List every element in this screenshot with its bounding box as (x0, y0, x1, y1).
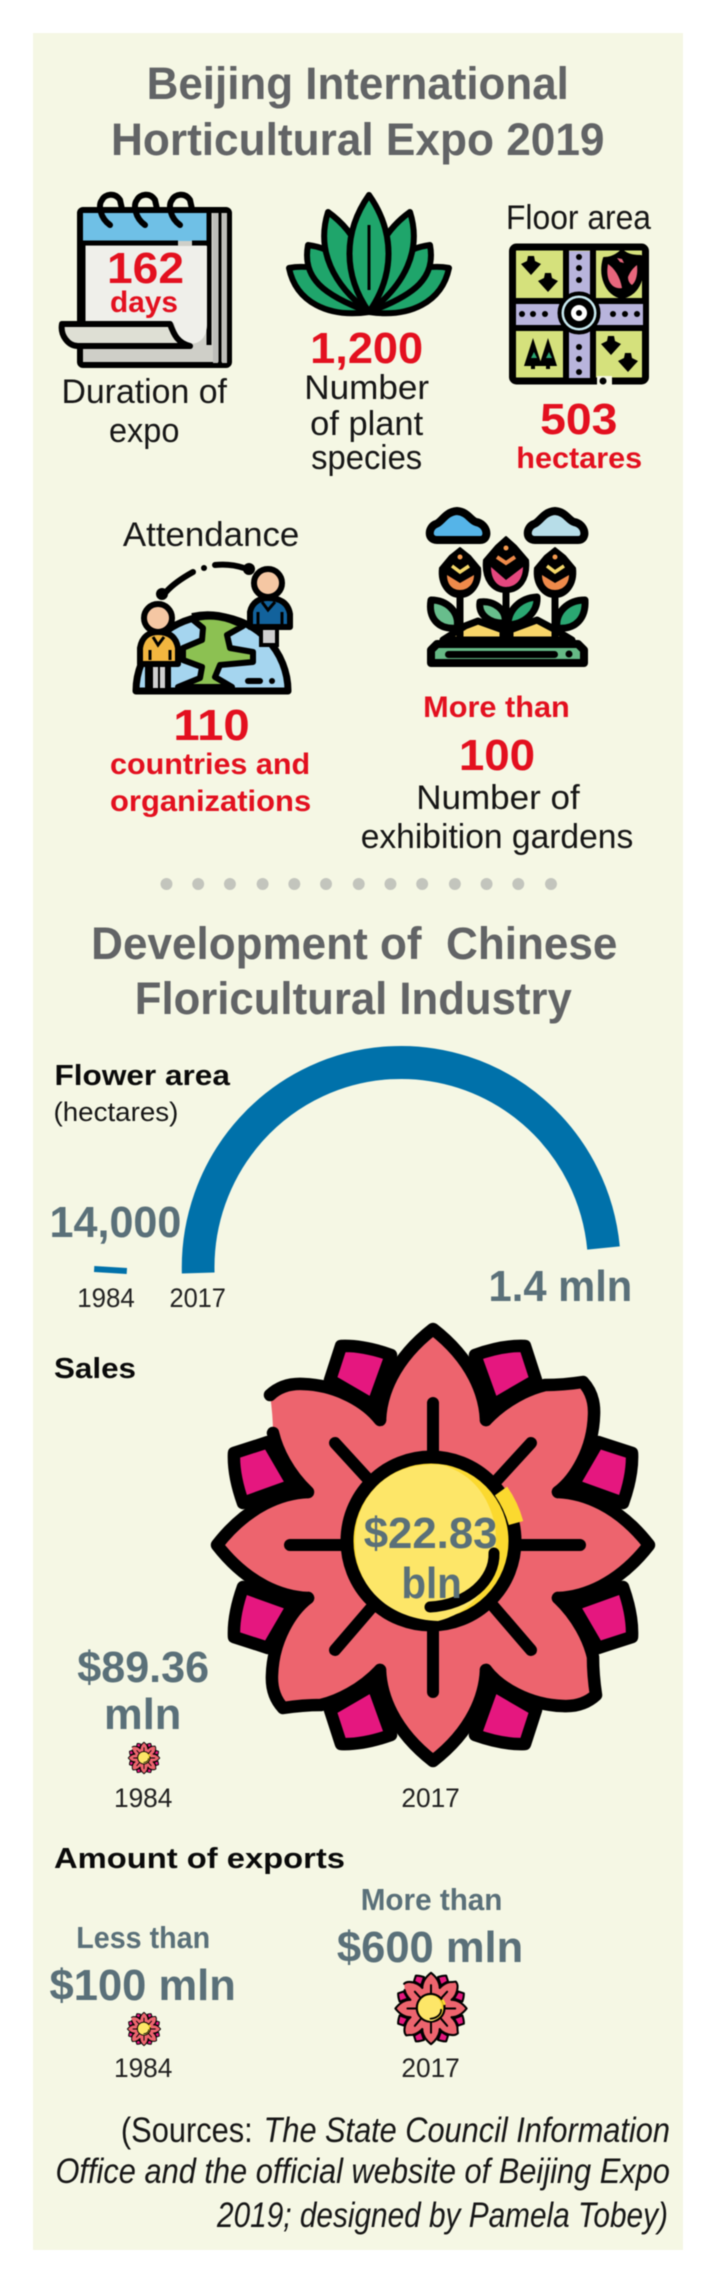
value: 1984 exports: Less than (76, 1920, 210, 1955)
value: 1984 sales (77, 1643, 209, 1739)
stat: plant species (304, 324, 429, 477)
icon: plant (289, 195, 449, 313)
year label 2017: 2017 (169, 1283, 226, 1313)
heading: development of Chinese floricultural industry (91, 919, 617, 1024)
source note: The State Council Information (264, 2111, 670, 2150)
year labels: exports (114, 2053, 460, 2083)
value: 2017 sales: bln (401, 1559, 462, 1608)
stat: exhibition gardens: exhibition gardens (361, 818, 633, 856)
icon: garden map (512, 247, 646, 386)
calendar number: 162 (107, 244, 184, 293)
year labels: exports: 1984 (114, 2053, 172, 2083)
stat: floor area value: hectares (516, 442, 642, 475)
stat: attendance value: 110 (173, 701, 250, 750)
chart: flower area arcs (50, 1062, 632, 1313)
icon: calendar with 162 days (62, 195, 229, 365)
stat: attendance value (110, 701, 311, 818)
label: attendance: Attendance (123, 516, 299, 554)
icon: exhibition garden (430, 511, 585, 663)
icon: small flower for 1984 sales (128, 1742, 160, 1774)
stat: plant species: species (311, 439, 422, 477)
year label 1984: 1984 (77, 1283, 135, 1313)
label: duration of expo: Duration of (61, 373, 228, 411)
stat: attendance value: organizations (110, 785, 311, 818)
value: 2017 sales: $22.83 (364, 1509, 497, 1558)
source note (55, 2111, 670, 2235)
heading: flower area: Flower area (55, 1060, 231, 1092)
stat: exhibition gardens: Number of (416, 779, 580, 817)
stat: exhibition gardens: 100 (459, 731, 535, 780)
title: Beijing International (147, 59, 569, 109)
stat: plant species: 1,200 (310, 324, 423, 373)
label: floor area: Floor area (506, 199, 651, 237)
value: 1984 exports (50, 1920, 236, 2010)
value: 2017 exports: $600 mln (337, 1923, 523, 1972)
heading: flower area (54, 1060, 231, 1127)
value: 2017 exports (337, 1882, 523, 1972)
value: 2017 flower area: 1.4 mln (489, 1262, 632, 1311)
heading: flower area: (hectares) (54, 1097, 178, 1127)
icon: small flower for 1984 exports (127, 2012, 161, 2046)
value: 1984 sales: $89.36 (77, 1643, 209, 1692)
title: Horticultural Expo 2019 (111, 115, 605, 165)
label: duration of expo: expo (109, 412, 179, 450)
value: 2017 sales (364, 1509, 497, 1608)
stat: plant species: Number (304, 369, 429, 407)
value: 1984 flower area: 14,000 (50, 1198, 181, 1247)
calendar unit: days (110, 286, 178, 319)
year labels: exports: 2017 (401, 2053, 460, 2083)
heading: sales: Sales (54, 1353, 136, 1385)
stat: exhibition gardens (361, 691, 633, 856)
title (111, 59, 605, 165)
stat: floor area value: 503 (540, 395, 617, 444)
heading: amount of exports: Amount of exports (54, 1843, 345, 1875)
year labels: sales: 2017 (401, 1783, 460, 1813)
icon: medium flower for 2017 exports (395, 1973, 467, 2044)
value: 1984 exports: $100 mln (50, 1961, 236, 2010)
icon: large flower for 2017 sales (217, 1329, 649, 1761)
label: duration of expo (61, 373, 228, 450)
icon: globe with two people (136, 563, 290, 691)
year labels: sales: 1984 (114, 1783, 172, 1813)
value: 2017 exports: More than (361, 1882, 502, 1917)
stat: floor area value (516, 395, 642, 475)
stat: attendance value: countries and (110, 748, 310, 781)
heading: development of Chinese floricultural industry: Development of Chinese (91, 919, 617, 969)
stat: plant species: of plant (310, 405, 424, 443)
heading: development of Chinese floricultural industry: Floricultural Industry (135, 974, 572, 1024)
source note: (Sources: (121, 2111, 253, 2150)
year labels: sales (114, 1783, 460, 1813)
stat: exhibition gardens: More than (423, 691, 570, 724)
value: 1984 sales: mln (104, 1690, 181, 1739)
